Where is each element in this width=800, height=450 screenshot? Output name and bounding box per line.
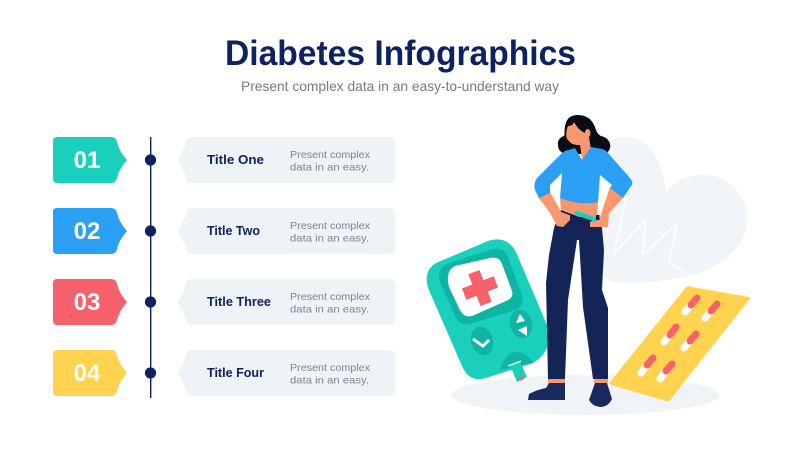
row 2	[53, 208, 395, 254]
insulin pen	[561, 211, 600, 220]
badge 02	[53, 208, 127, 254]
screen surround	[439, 249, 523, 324]
title: Diabetes Infographics	[225, 34, 576, 73]
ground shadow	[452, 375, 720, 415]
face and neck	[566, 122, 591, 160]
row 1	[53, 137, 395, 183]
card 4	[177, 350, 395, 396]
timeline line	[150, 137, 151, 398]
row 3	[53, 279, 395, 325]
heart background	[597, 137, 747, 283]
belly	[560, 197, 598, 220]
number 03: 03	[74, 289, 100, 316]
trousers	[546, 212, 608, 379]
feet	[528, 383, 612, 407]
number 01: 01	[74, 147, 100, 174]
card 4 title: Title Four	[207, 365, 264, 380]
subtitle: Present complex data in an easy-to-understand way	[241, 78, 559, 94]
timeline dot 2	[145, 225, 156, 237]
meter buttons	[468, 307, 535, 358]
card 4 text: Present complex	[290, 362, 371, 374]
card 1 text: Present complex	[290, 149, 371, 161]
illustration	[427, 115, 750, 415]
card 2	[177, 208, 395, 254]
glucose meter	[427, 239, 549, 382]
forearms and hands	[538, 187, 623, 227]
woman	[528, 115, 632, 407]
badge 03	[53, 279, 127, 325]
heart pulse line	[614, 198, 690, 275]
test strip slot	[500, 352, 533, 370]
card 3 title: Title Three	[207, 294, 271, 309]
card 3	[177, 279, 395, 325]
test strip	[508, 361, 527, 382]
hair	[558, 115, 610, 154]
number 04: 04	[74, 360, 101, 387]
card 2 text	[290, 220, 371, 244]
card 1 text: data in an easy.	[290, 162, 369, 174]
pills	[641, 298, 717, 379]
timeline dot 1	[145, 154, 156, 166]
ankle bands	[548, 379, 608, 383]
card 1 text	[290, 149, 371, 174]
screen	[448, 258, 512, 316]
timeline dot 3	[145, 296, 156, 308]
card 2 text: data in an easy.	[290, 232, 369, 244]
blue shirt	[534, 147, 632, 203]
pill pack	[610, 286, 750, 401]
card 1	[177, 137, 395, 183]
card 3 text	[290, 291, 371, 316]
badge 01	[53, 137, 127, 183]
card 4 text: data in an easy.	[290, 374, 369, 386]
card 1 title: Title One	[207, 152, 264, 167]
red cross	[458, 266, 502, 310]
card 3 text: data in an easy.	[290, 304, 369, 316]
timeline dot 4	[145, 367, 156, 379]
card 2 title: Title Two	[207, 223, 260, 238]
badge 04	[53, 350, 127, 396]
card 3 text: Present complex	[290, 291, 371, 303]
card 2 text: Present complex	[290, 220, 371, 232]
gap between arm and torso	[550, 173, 612, 228]
number 02: 02	[74, 218, 100, 245]
row 4	[53, 350, 395, 396]
card 4 text	[290, 362, 371, 386]
